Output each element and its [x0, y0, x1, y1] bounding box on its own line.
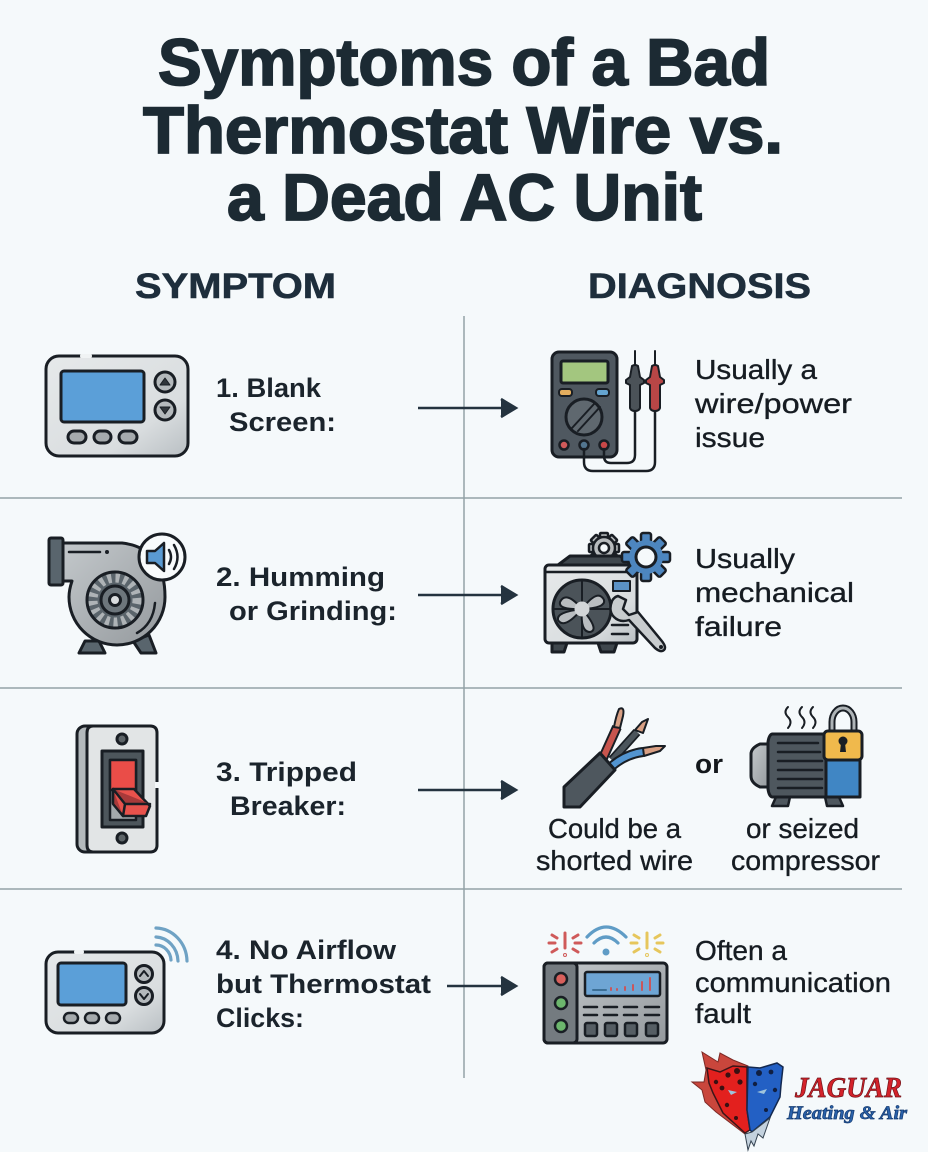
title: [143, 25, 783, 234]
row 1: blank screen: [46, 351, 852, 471]
label: blank screen: Screen:: [229, 407, 336, 437]
label: tripped breaker: Breaker:: [230, 791, 346, 821]
caption: or seized compressor: compressor: [731, 845, 880, 876]
caption: or seized compressor: [731, 813, 880, 876]
logo wordmark: Heating & Air: [786, 1103, 908, 1124]
arrow: [418, 586, 516, 604]
icon: stripped wire: [564, 708, 665, 807]
label: humming or grinding: or Grinding:: [229, 596, 397, 626]
label: humming or grinding: 2. Humming: [216, 562, 385, 592]
logo mark: jaguar head: [692, 1052, 783, 1150]
diagnosis text: wire or power issue: [694, 354, 852, 453]
diagnosis text: mechanical failure: mechanical: [695, 577, 854, 608]
icon: blower motor with speaker: [49, 534, 185, 653]
column heading: symptom: SYMPTOM: [135, 267, 336, 306]
column heading: diagnosis: DIAGNOSIS: [588, 267, 811, 306]
label: blank screen: [216, 373, 336, 437]
row 2: humming or grinding: [49, 533, 854, 653]
label: no airflow but thermostat clicks: Clicks:: [216, 1003, 304, 1033]
icon: wifi thermostat: [46, 928, 187, 1033]
diagnosis text: mechanical failure: [695, 543, 854, 642]
label: no airflow but thermostat clicks: 4. No Airflow: [216, 935, 397, 965]
diagnosis text: communication fault: [695, 935, 891, 1029]
diagnosis text: wire or power issue: wire/power: [694, 388, 852, 419]
logo: Jaguar Heating and Air: [692, 1052, 908, 1150]
label: humming or grinding: [216, 562, 397, 626]
diagnosis text: wire or power issue: issue: [695, 422, 765, 453]
diagnosis text: communication fault: fault: [695, 998, 751, 1029]
row 4: no airflow but thermostat clicks: [46, 927, 891, 1043]
logo wordmark: JAGUAR: [794, 1073, 902, 1104]
icon: AC condenser with gears and wrench: [545, 533, 670, 652]
diagnosis text: wire or power issue: Usually a: [695, 354, 818, 385]
title: a Dead AC Unit: [227, 160, 702, 234]
caption: could be a shorted wire: [536, 813, 693, 876]
title: Thermostat Wire vs.: [143, 93, 783, 167]
caption: could be a shorted wire: shorted wire: [536, 845, 693, 876]
diagnosis text: mechanical failure: failure: [695, 611, 782, 642]
label: tripped breaker: [216, 757, 357, 821]
logo wordmark: [786, 1073, 908, 1124]
icon: seized compressor with lock: [751, 707, 862, 806]
icon: thermostat: [46, 356, 188, 456]
label: blank screen: 1. Blank: [216, 373, 322, 403]
row 3: tripped breaker: [77, 707, 880, 876]
label: tripped breaker: 3. Tripped: [216, 757, 357, 787]
icon: multimeter: [552, 351, 664, 471]
caption: could be a shorted wire: Could be a: [548, 813, 682, 844]
diagnosis text: communication fault: communication: [695, 967, 891, 998]
label: no airflow but thermostat clicks: [216, 935, 431, 1033]
icon: breaker switch: [77, 726, 157, 852]
diagnosis text: communication fault: Often a: [695, 935, 788, 966]
title: Symptoms of a Bad: [158, 25, 770, 99]
arrow: [418, 399, 516, 417]
arrow: [418, 781, 516, 799]
label: no airflow but thermostat clicks: but Thermostat: [216, 969, 431, 999]
connector word: or: or: [695, 749, 724, 779]
diagnosis text: mechanical failure: Usually: [695, 543, 795, 574]
icon: control panel with alerts: [544, 927, 667, 1043]
caption: or seized compressor: or seized: [746, 813, 859, 844]
arrow: [447, 977, 516, 995]
